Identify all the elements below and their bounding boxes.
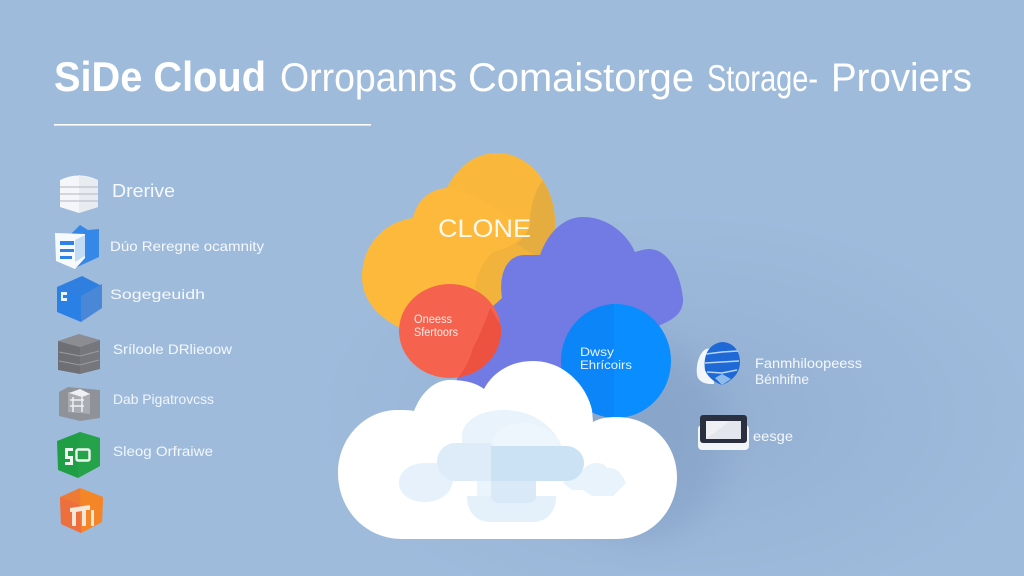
icon: pale cloud inside bbox=[399, 410, 626, 522]
icon: blue cube bbox=[57, 276, 102, 322]
title: Orropanns bbox=[280, 56, 457, 100]
title underline bbox=[54, 124, 371, 126]
icon: grey server block bbox=[58, 334, 100, 374]
cloud: white foreground bbox=[338, 361, 677, 539]
cloud: yellow CLONE bbox=[362, 153, 555, 328]
label: Fanmhiloopeess Bénhifne: Fanmhiloopeess bbox=[755, 355, 862, 371]
label: Oneess Sfertoors bbox=[414, 314, 458, 339]
label: Dwsy Ehricoirs: Dwsy bbox=[580, 347, 614, 359]
label: CLONE: CLONE bbox=[438, 215, 531, 243]
shadow: central clouds bbox=[555, 340, 725, 540]
label: eesge: eesge bbox=[753, 428, 793, 444]
label: Dwsy Ehricoirs bbox=[580, 347, 632, 372]
label: Oneess Sfertoors: Sfertoors bbox=[414, 327, 458, 339]
title: Storage- bbox=[707, 58, 818, 99]
icon: white server stack bbox=[60, 175, 98, 213]
label: Sríloole DRlieoow: Sríloole DRlieoow bbox=[113, 341, 233, 357]
icon: green cube bbox=[57, 432, 100, 478]
circle: blue bbox=[560, 300, 671, 420]
label: Dab Pigatrovcss: Dab Pigatrovcss bbox=[113, 391, 214, 407]
title: Proviers bbox=[831, 56, 972, 100]
label: Dúo Reregne ocamnity: Dúo Reregne ocamnity bbox=[110, 238, 264, 254]
title bbox=[54, 53, 972, 100]
label: Dwsy Ehricoirs: Ehrícoirs bbox=[580, 360, 632, 372]
icon: blue and white folder bbox=[55, 225, 99, 269]
icon: blue striped shield bbox=[697, 342, 740, 385]
label: Sleog Orfraiwe: Sleog Orfraiwe bbox=[113, 443, 213, 459]
circle: red bbox=[399, 284, 504, 380]
title: SiDe Cloud bbox=[54, 53, 266, 100]
icon: tablet device bbox=[698, 415, 749, 450]
label: Sogegeuidh: Sogegeuidh bbox=[110, 286, 205, 302]
label: Oneess Sfertoors: Oneess bbox=[414, 314, 452, 326]
label: Fanmhiloopeess Bénhifne bbox=[755, 355, 862, 387]
icon: grey box bbox=[59, 387, 100, 421]
label: Fanmhiloopeess Bénhifne: Bénhifne bbox=[755, 371, 809, 387]
title: Comaistorge bbox=[468, 56, 694, 100]
icon: orange cube bbox=[60, 488, 103, 533]
label: Drerive: Drerive bbox=[112, 181, 175, 201]
cloud: purple bbox=[450, 217, 683, 400]
